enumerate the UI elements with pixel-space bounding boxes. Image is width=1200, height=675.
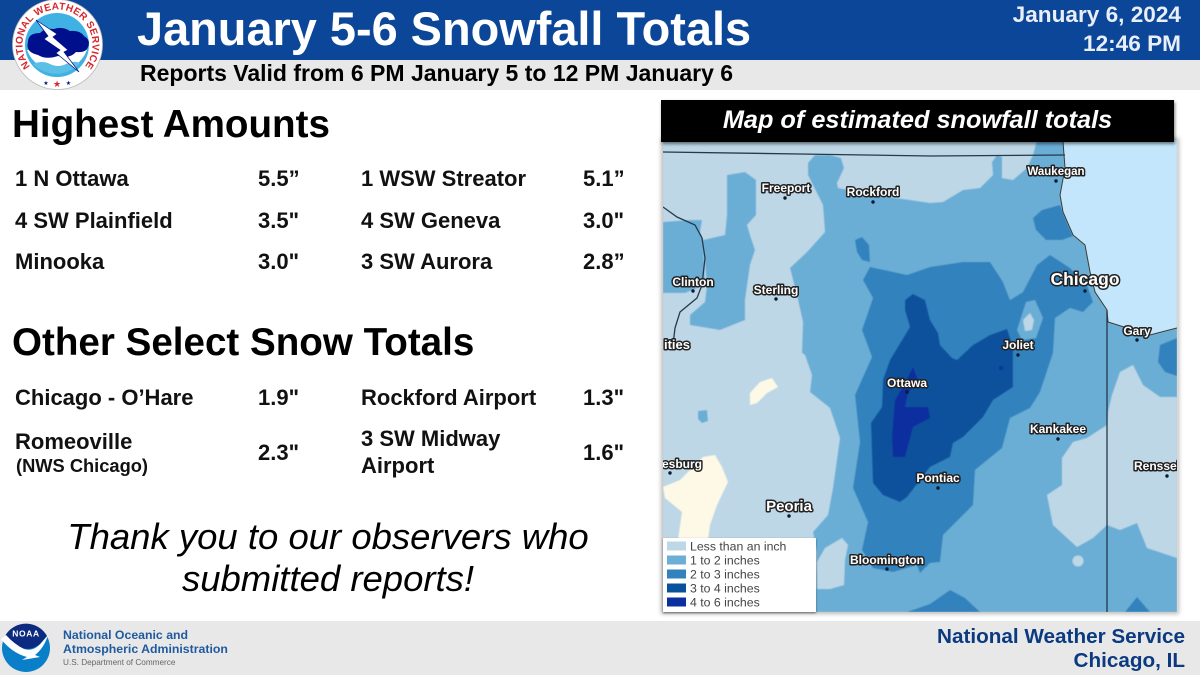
city labels: Peoria — [766, 498, 813, 515]
city labels: ities — [664, 337, 690, 352]
legend item: 3 to 4 inches: 3 to 4 inches — [690, 582, 760, 596]
city labels: Rensselaer — [1134, 459, 1198, 473]
heading: other select snow totals: Other Select Snow Totals — [12, 321, 474, 364]
date and time: January 6, 2024 — [1013, 2, 1181, 27]
city dots — [668, 179, 1169, 571]
map shading — [643, 140, 1198, 612]
legend item: 1 to 2 inches: 1 to 2 inches — [690, 554, 760, 568]
value: 2.8: 2.8” — [583, 249, 625, 274]
icon: NWS logo: ★ — [43, 80, 49, 87]
value: 1.6: 1.6" — [583, 440, 624, 465]
NOAA text: National Oceanic and — [63, 628, 188, 642]
NOAA department text: U.S. Department of Commerce — [63, 658, 175, 667]
title: January 5-6 Snowfall Totals — [137, 3, 751, 55]
city labels: Ottawa — [887, 376, 927, 390]
city labels: Chicago — [1050, 269, 1120, 289]
legend item: 4 to 6 inches: 4 to 6 inches — [690, 596, 760, 610]
icon: NWS logo: ★ — [53, 79, 61, 89]
value: 5.5: 5.5” — [258, 166, 300, 191]
city labels: Bloomington — [850, 553, 924, 567]
legend — [662, 538, 818, 614]
city labels: Joliet — [1002, 338, 1034, 352]
thank you note: submitted reports! — [182, 558, 474, 599]
icon: NOAA logo — [1, 624, 50, 672]
icon: NWS logo: ★ — [66, 80, 71, 87]
row: Chicago O'Hare: Chicago - O’Hare — [15, 385, 193, 410]
city labels: Kankakee — [1030, 422, 1086, 436]
footer office name: Chicago, IL — [1074, 649, 1185, 672]
header band — [0, 0, 1200, 60]
city labels: Sterling — [754, 283, 798, 297]
legend item: 2 to 3 inches: 2 to 3 inches — [690, 568, 760, 582]
row: 4 SW Plainfield: 4 SW Plainfield — [15, 208, 173, 233]
legend item: less than an inch: Less than an inch — [690, 540, 787, 554]
note: NWS Chicago: (NWS Chicago) — [16, 455, 148, 476]
state borders and shoreline — [663, 142, 1177, 612]
city labels: Clinton — [672, 275, 714, 289]
city labels: Freeport — [762, 181, 810, 195]
value: 3.5: 3.5" — [258, 208, 299, 233]
NOAA text — [63, 628, 228, 656]
city labels: Waukegan — [1027, 166, 1085, 178]
thank you note — [67, 516, 589, 599]
row: 3 SW Midway Airport: 3 SW Midway — [361, 426, 500, 451]
date and time: 12:46 PM — [1083, 31, 1181, 56]
value: 3.0: 3.0" — [583, 208, 624, 233]
subtitle band — [0, 60, 1200, 90]
row: 3 SW Midway Airport: Airport — [361, 453, 434, 478]
row: Rockford Airport: Rockford Airport — [361, 385, 536, 410]
panel: highest amounts — [12, 103, 625, 274]
date and time — [1013, 2, 1181, 56]
row: 3 SW Midway Airport — [361, 426, 500, 478]
white margin right of map — [1177, 140, 1178, 612]
row: 1 N Ottawa: 1 N Ottawa — [15, 166, 129, 191]
city labels: Gary — [1123, 324, 1151, 338]
thank you note: Thank you to our observers who — [67, 516, 589, 557]
row: Romeoville: Romeoville — [15, 429, 132, 454]
value: 5.1: 5.1” — [583, 166, 625, 191]
row: 1 WSW Streator: 1 WSW Streator — [361, 166, 526, 191]
panel: other select snow totals — [12, 321, 624, 478]
value: 3.0: 3.0" — [258, 249, 299, 274]
subtitle: Reports Valid from 6 PM January 5 to 12 PM January 6 — [140, 60, 733, 86]
heading: highest amounts: Highest Amounts — [12, 103, 330, 146]
row: 4 SW Geneva: 4 SW Geneva — [361, 208, 500, 233]
value: 1.9: 1.9" — [258, 385, 299, 410]
NOAA text: Atmospheric Administration — [63, 642, 228, 656]
value: 1.3: 1.3" — [583, 385, 624, 410]
row: Minooka: Minooka — [15, 249, 104, 274]
footer band — [0, 621, 1200, 675]
row: 3 SW Aurora: 3 SW Aurora — [361, 249, 492, 274]
city labels: Rockford — [847, 185, 899, 199]
city labels: Galesburg — [643, 457, 702, 471]
footer office name — [937, 625, 1185, 672]
city labels: Pontiac — [916, 471, 960, 485]
icon: NOAA logo: NOAA — [12, 628, 40, 638]
value: 2.3: 2.3" — [258, 440, 299, 465]
icon: NWS logo: NATIONAL WEATHER SERVICE — [16, 2, 100, 70]
map banner — [661, 100, 1174, 142]
city labels — [643, 166, 1198, 567]
map banner: Map of estimated snowfall totals — [723, 106, 1112, 134]
chart: snowfall map — [658, 136, 1182, 616]
footer office name: National Weather Service — [937, 625, 1185, 648]
